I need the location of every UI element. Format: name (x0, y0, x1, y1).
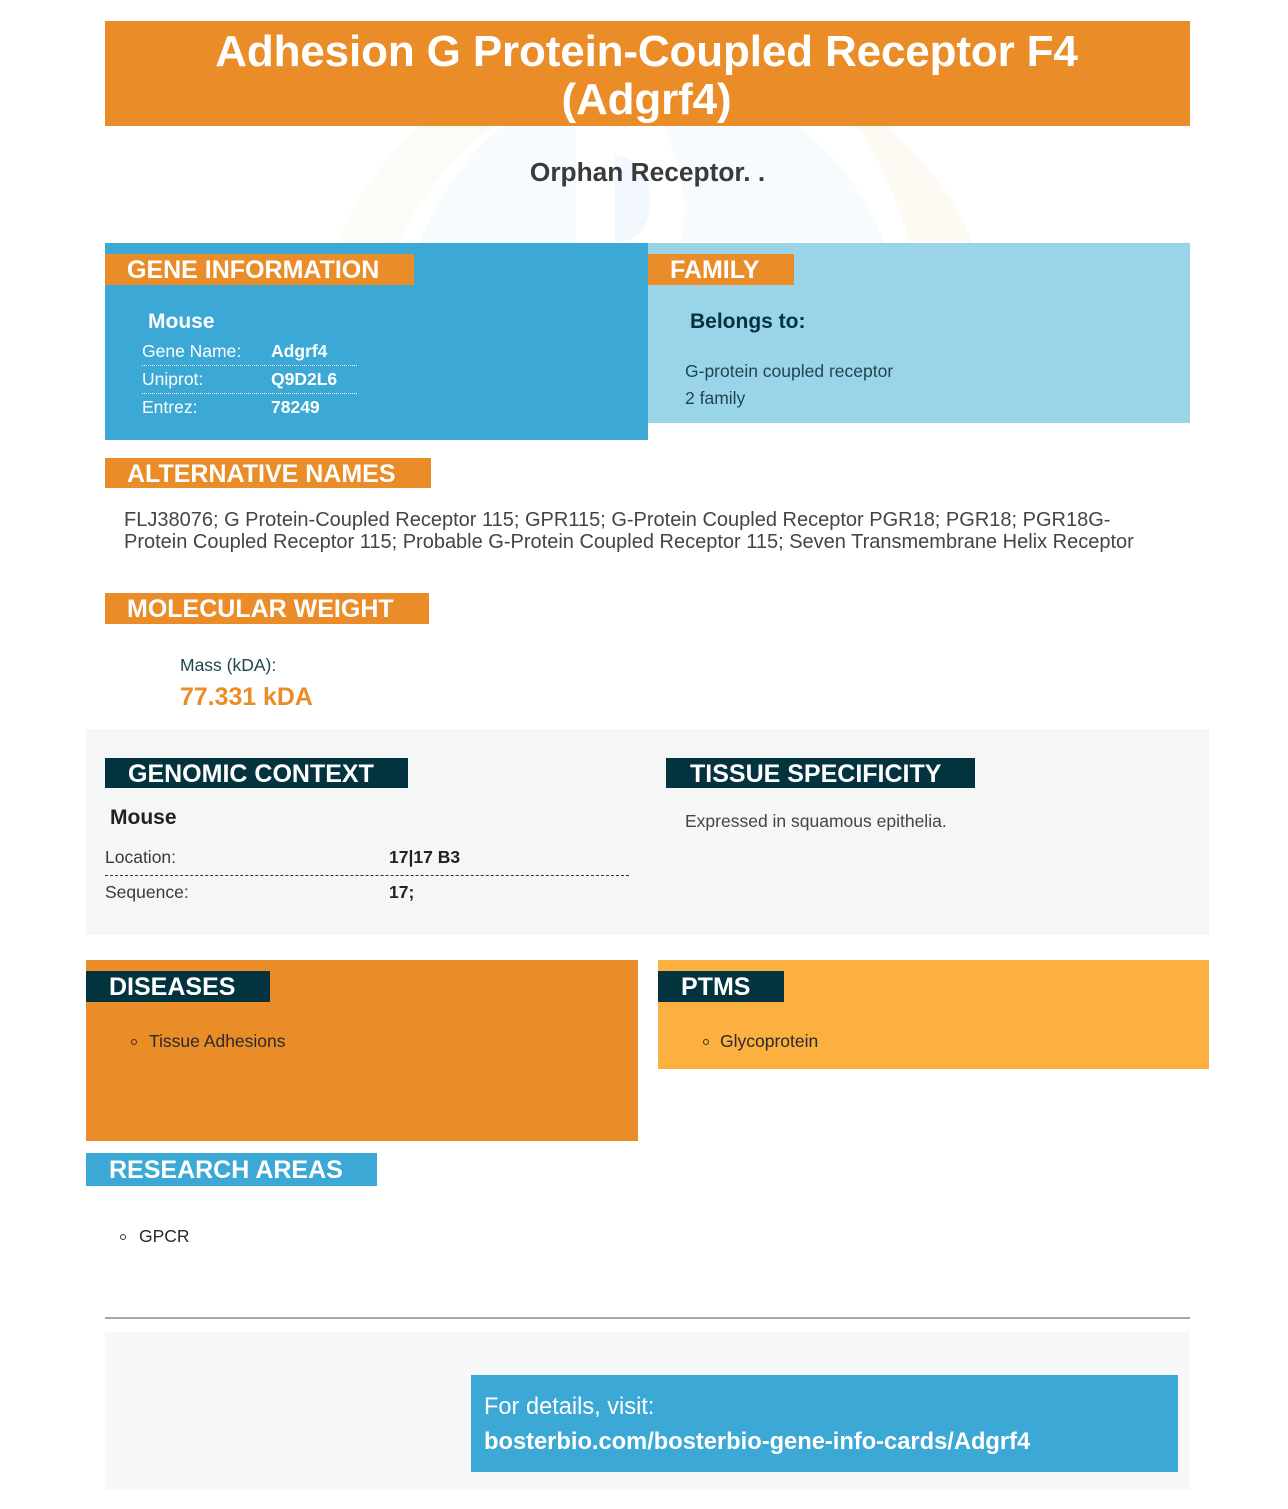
panel: footer (105, 1332, 1190, 1490)
entrez row (142, 397, 320, 417)
heading: research areas: RESEARCH AREAS (109, 1156, 343, 1184)
title banner: (Adgrf4) (562, 75, 731, 124)
alternative names text: FLJ38076; G Protein-Coupled Receptor 115; GPR115; G-Protein Coupled Receptor PGR18; PGR18; PGR18G- (124, 509, 1110, 531)
alternative names text (124, 509, 1134, 553)
heading: family (648, 254, 794, 285)
panel: ptms (658, 960, 1209, 1069)
title banner (105, 21, 1190, 126)
belongs to label: Belongs to: (690, 310, 806, 333)
tissue specificity text: Expressed in squamous epithelia. (685, 811, 947, 831)
subtitle: Orphan Receptor. . (530, 157, 765, 187)
panel: diseases (86, 960, 638, 1141)
panel: gene information (105, 243, 648, 440)
sequence row (105, 882, 414, 902)
gene name row: Gene Name: (142, 341, 241, 361)
location row: 17|17 B3 (389, 847, 460, 867)
title banner: Adhesion G Protein-Coupled Receptor F4 (215, 27, 1078, 76)
entrez row: Entrez: (142, 397, 197, 417)
heading: genomic context: GENOMIC CONTEXT (128, 760, 374, 788)
sequence row: 17; (389, 882, 414, 902)
research area list item: GPCR (139, 1226, 190, 1246)
watermark logo (338, 126, 973, 243)
family text: 2 family (685, 388, 745, 408)
mass value: 77.331 kDA (180, 683, 313, 711)
heading: family: FAMILY (670, 256, 759, 284)
uniprot row (142, 368, 357, 394)
gene name row (142, 340, 357, 366)
sequence row: Sequence: (105, 882, 189, 902)
species: mouse: Mouse (110, 806, 177, 829)
heading: alternative names: ALTERNATIVE NAMES (127, 460, 396, 488)
heading: tissue specificity: TISSUE SPECIFICITY (690, 760, 941, 788)
family text (685, 361, 893, 408)
heading: molecular weight: MOLECULAR WEIGHT (127, 595, 394, 623)
panel: genomic context and tissue specificity (86, 729, 1209, 935)
location row: Location: (105, 847, 176, 867)
divider line (105, 1317, 1190, 1319)
family text: G-protein coupled receptor (685, 361, 893, 381)
uniprot row: Q9D2L6 (271, 369, 337, 389)
mass label: Mass (kDA): (180, 655, 276, 675)
callout label: For details, visit: (484, 1394, 654, 1420)
heading: diseases: DISEASES (109, 973, 235, 1001)
heading: research areas (86, 1153, 377, 1186)
heading: ptms (658, 971, 784, 1002)
location row (105, 845, 629, 876)
ptm list item: Glycoprotein (720, 1031, 818, 1051)
entrez row: 78249 (271, 397, 320, 417)
gene name row: Adgrf4 (271, 341, 327, 361)
panel: family (648, 243, 1190, 423)
uniprot row: Uniprot: (142, 369, 203, 389)
disease list item: Tissue Adhesions (149, 1031, 286, 1051)
heading: gene information: GENE INFORMATION (127, 256, 379, 284)
callout url: bosterbio.com/bosterbio-gene-info-cards/Adgrf4 (484, 1429, 1030, 1455)
alternative names text: Protein Coupled Receptor 115; Probable G-Protein Coupled Receptor 115; Seven Transmembrane Helix Receptor (124, 531, 1134, 553)
heading: ptms: PTMS (681, 973, 750, 1001)
callout: details link (471, 1375, 1178, 1472)
heading: diseases (86, 971, 270, 1002)
species: mouse: Mouse (148, 310, 215, 333)
